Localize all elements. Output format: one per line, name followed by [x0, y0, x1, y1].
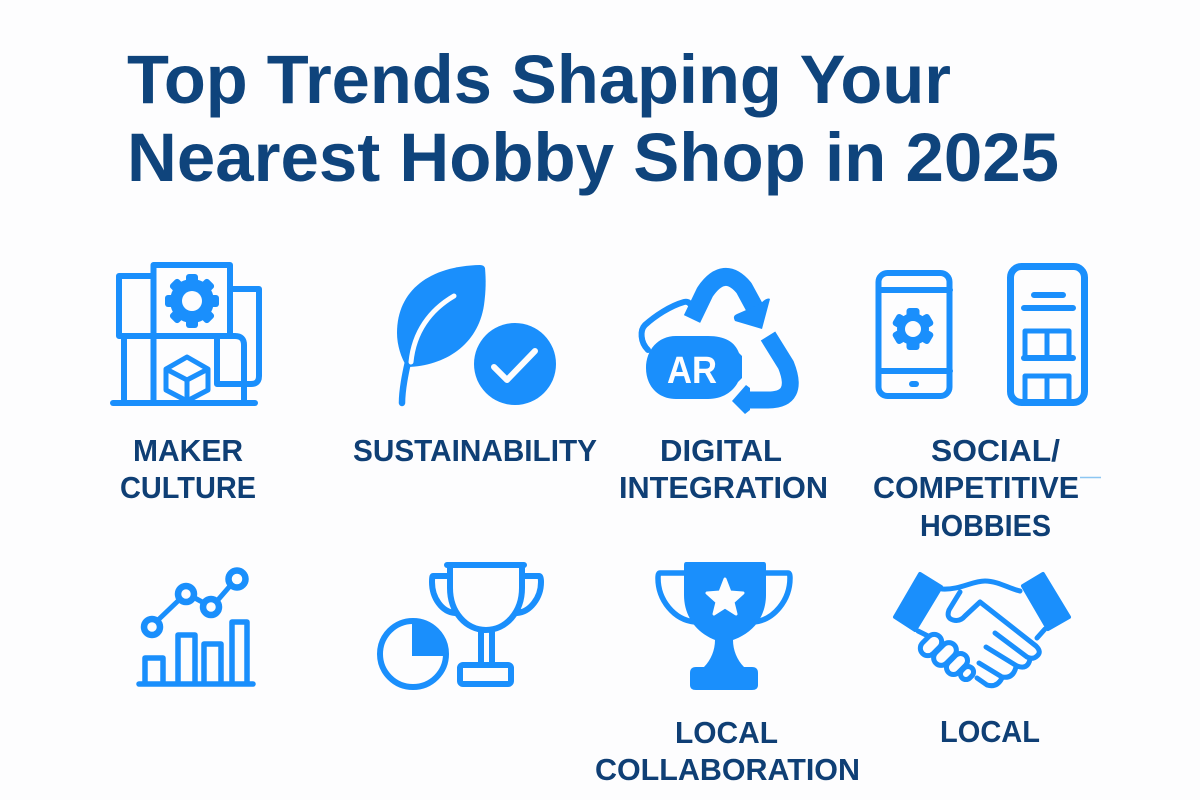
icon: two phones — [878, 266, 1084, 402]
label: local collaboration: COLLABORATION — [595, 752, 860, 787]
label: maker culture — [120, 433, 256, 505]
label: maker culture: MAKER — [133, 433, 243, 468]
label: maker culture: CULTURE — [120, 470, 256, 505]
icon: trophy with star — [658, 562, 790, 690]
label: social competitive hobbies: HOBBIES — [920, 508, 1051, 543]
title: Nearest Hobby Shop in 2025 — [127, 119, 1059, 196]
label: sustainability: SUSTAINABILITY — [353, 433, 597, 468]
label: social competitive hobbies — [873, 433, 1101, 543]
label: social competitive hobbies: SOCIAL/ — [931, 433, 1060, 468]
label: social competitive hobbies: COMPETITIVE — [873, 470, 1079, 505]
label: digital integration: DIGITAL — [660, 433, 782, 468]
label: digital integration — [619, 433, 828, 505]
icon: bar and line chart — [139, 570, 253, 684]
label: local collaboration — [595, 715, 860, 787]
icon: trophy with pie chart — [380, 565, 541, 687]
icon: AR recycle — [642, 277, 790, 414]
label: digital integration: INTEGRATION — [619, 470, 828, 505]
title: Top Trends Shaping Your — [127, 41, 951, 118]
icon: AR recycle: AR — [667, 350, 717, 392]
icon: maker culture building — [113, 265, 259, 403]
title — [127, 41, 1059, 196]
label: local collaboration: LOCAL — [675, 715, 778, 750]
icon: leaf with check — [397, 265, 556, 405]
icon: handshake — [895, 574, 1069, 686]
label: local: LOCAL — [940, 714, 1040, 749]
